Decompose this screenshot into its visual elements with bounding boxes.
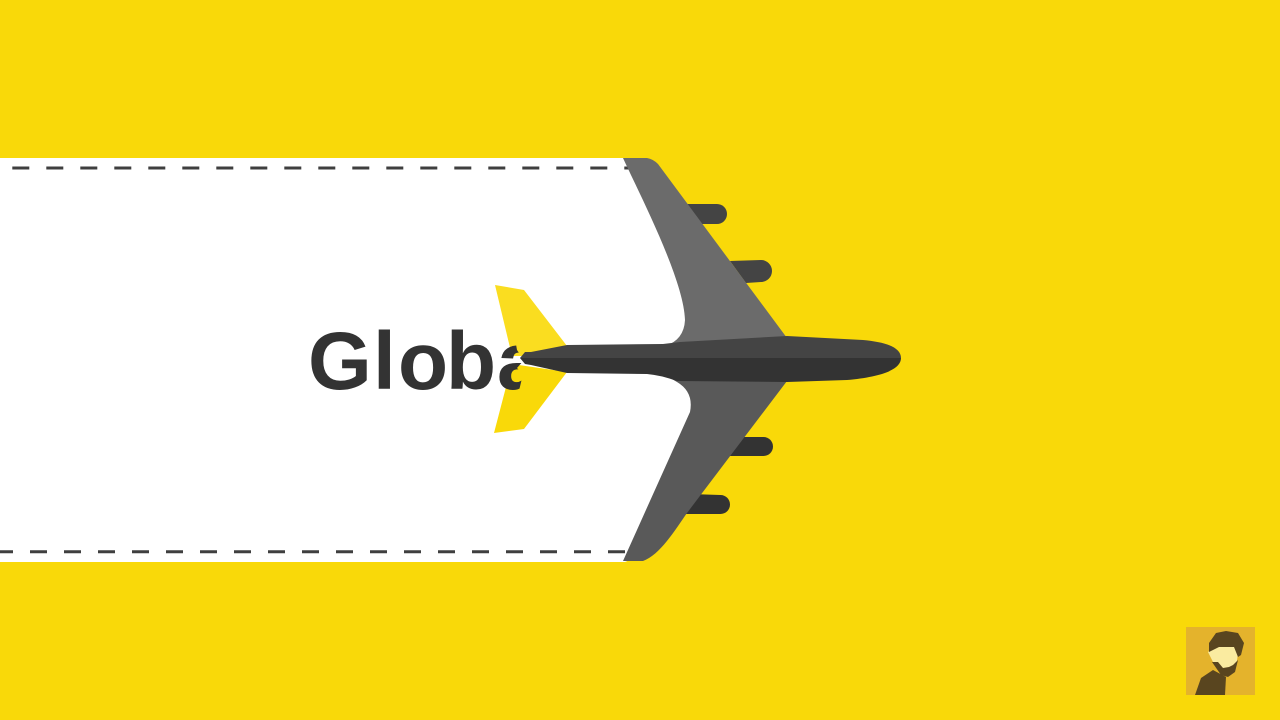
- dashed top border: [12, 166, 640, 170]
- engines: lower: [680, 437, 773, 514]
- avatar: face: [1208, 642, 1238, 677]
- scene: plane towing banner: [0, 158, 1255, 695]
- heading text: Globa: [308, 316, 544, 407]
- avatar: beard: [1212, 660, 1238, 677]
- upper wing: [623, 158, 787, 346]
- white banner: [0, 158, 700, 562]
- fuselage: lower half: [520, 358, 901, 382]
- fuselage: [520, 336, 901, 382]
- tail fin: upper: [495, 285, 567, 356]
- lower wing: [623, 375, 787, 561]
- avatar: shoulders: [1195, 670, 1226, 695]
- avatar badge: [1186, 627, 1255, 695]
- dashed bottom border: [0, 550, 626, 553]
- fuselage: upper half: [520, 336, 901, 358]
- engines: upper: [686, 204, 772, 283]
- tail fin: lower: [494, 364, 567, 433]
- avatar: hair: [1209, 631, 1244, 657]
